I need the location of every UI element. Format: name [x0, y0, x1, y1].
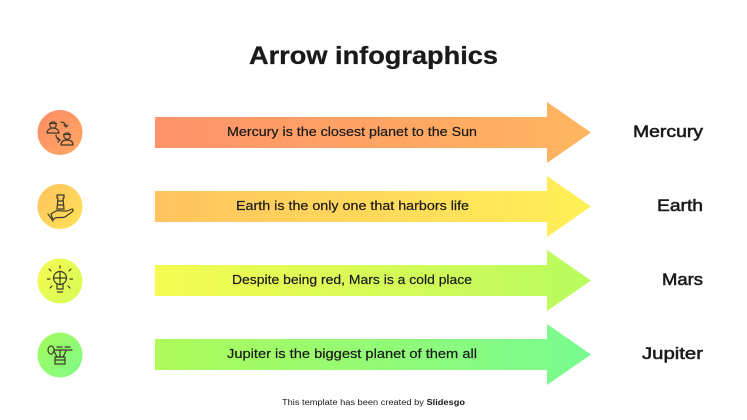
label: Earth: Earth: [657, 196, 703, 215]
icon: hand holding tower: [38, 184, 82, 229]
label: Mars: Mars: [662, 270, 703, 289]
description: Earth: Earth is the only one that harbors life: [236, 198, 469, 213]
description: Mars: Despite being red, Mars is a cold place: [232, 272, 472, 287]
label: Jupiter: Jupiter: [642, 344, 703, 363]
row: Jupiter: [38, 324, 703, 385]
arrow: Jupiter: [155, 324, 591, 385]
icon: people exchanging: [38, 110, 82, 155]
row: Mercury: [38, 102, 704, 163]
icon: light bulb: [38, 258, 82, 304]
description: Jupiter: Jupiter is the biggest planet of them all: [227, 346, 477, 361]
description: Mercury: Mercury is the closest planet to the Sun: [227, 124, 477, 139]
row: Mars: [38, 250, 703, 311]
arrow: Mercury: [155, 102, 591, 163]
label: Mercury: Mercury: [633, 122, 704, 141]
arrow: Mars: [155, 250, 591, 311]
row: Earth: [38, 176, 703, 237]
icon: plant in pot: [38, 332, 82, 378]
title: Arrow infographics: [249, 42, 498, 70]
arrow: Earth: [155, 176, 591, 237]
credit line: This template has been created by Slidesgo: [282, 398, 465, 407]
